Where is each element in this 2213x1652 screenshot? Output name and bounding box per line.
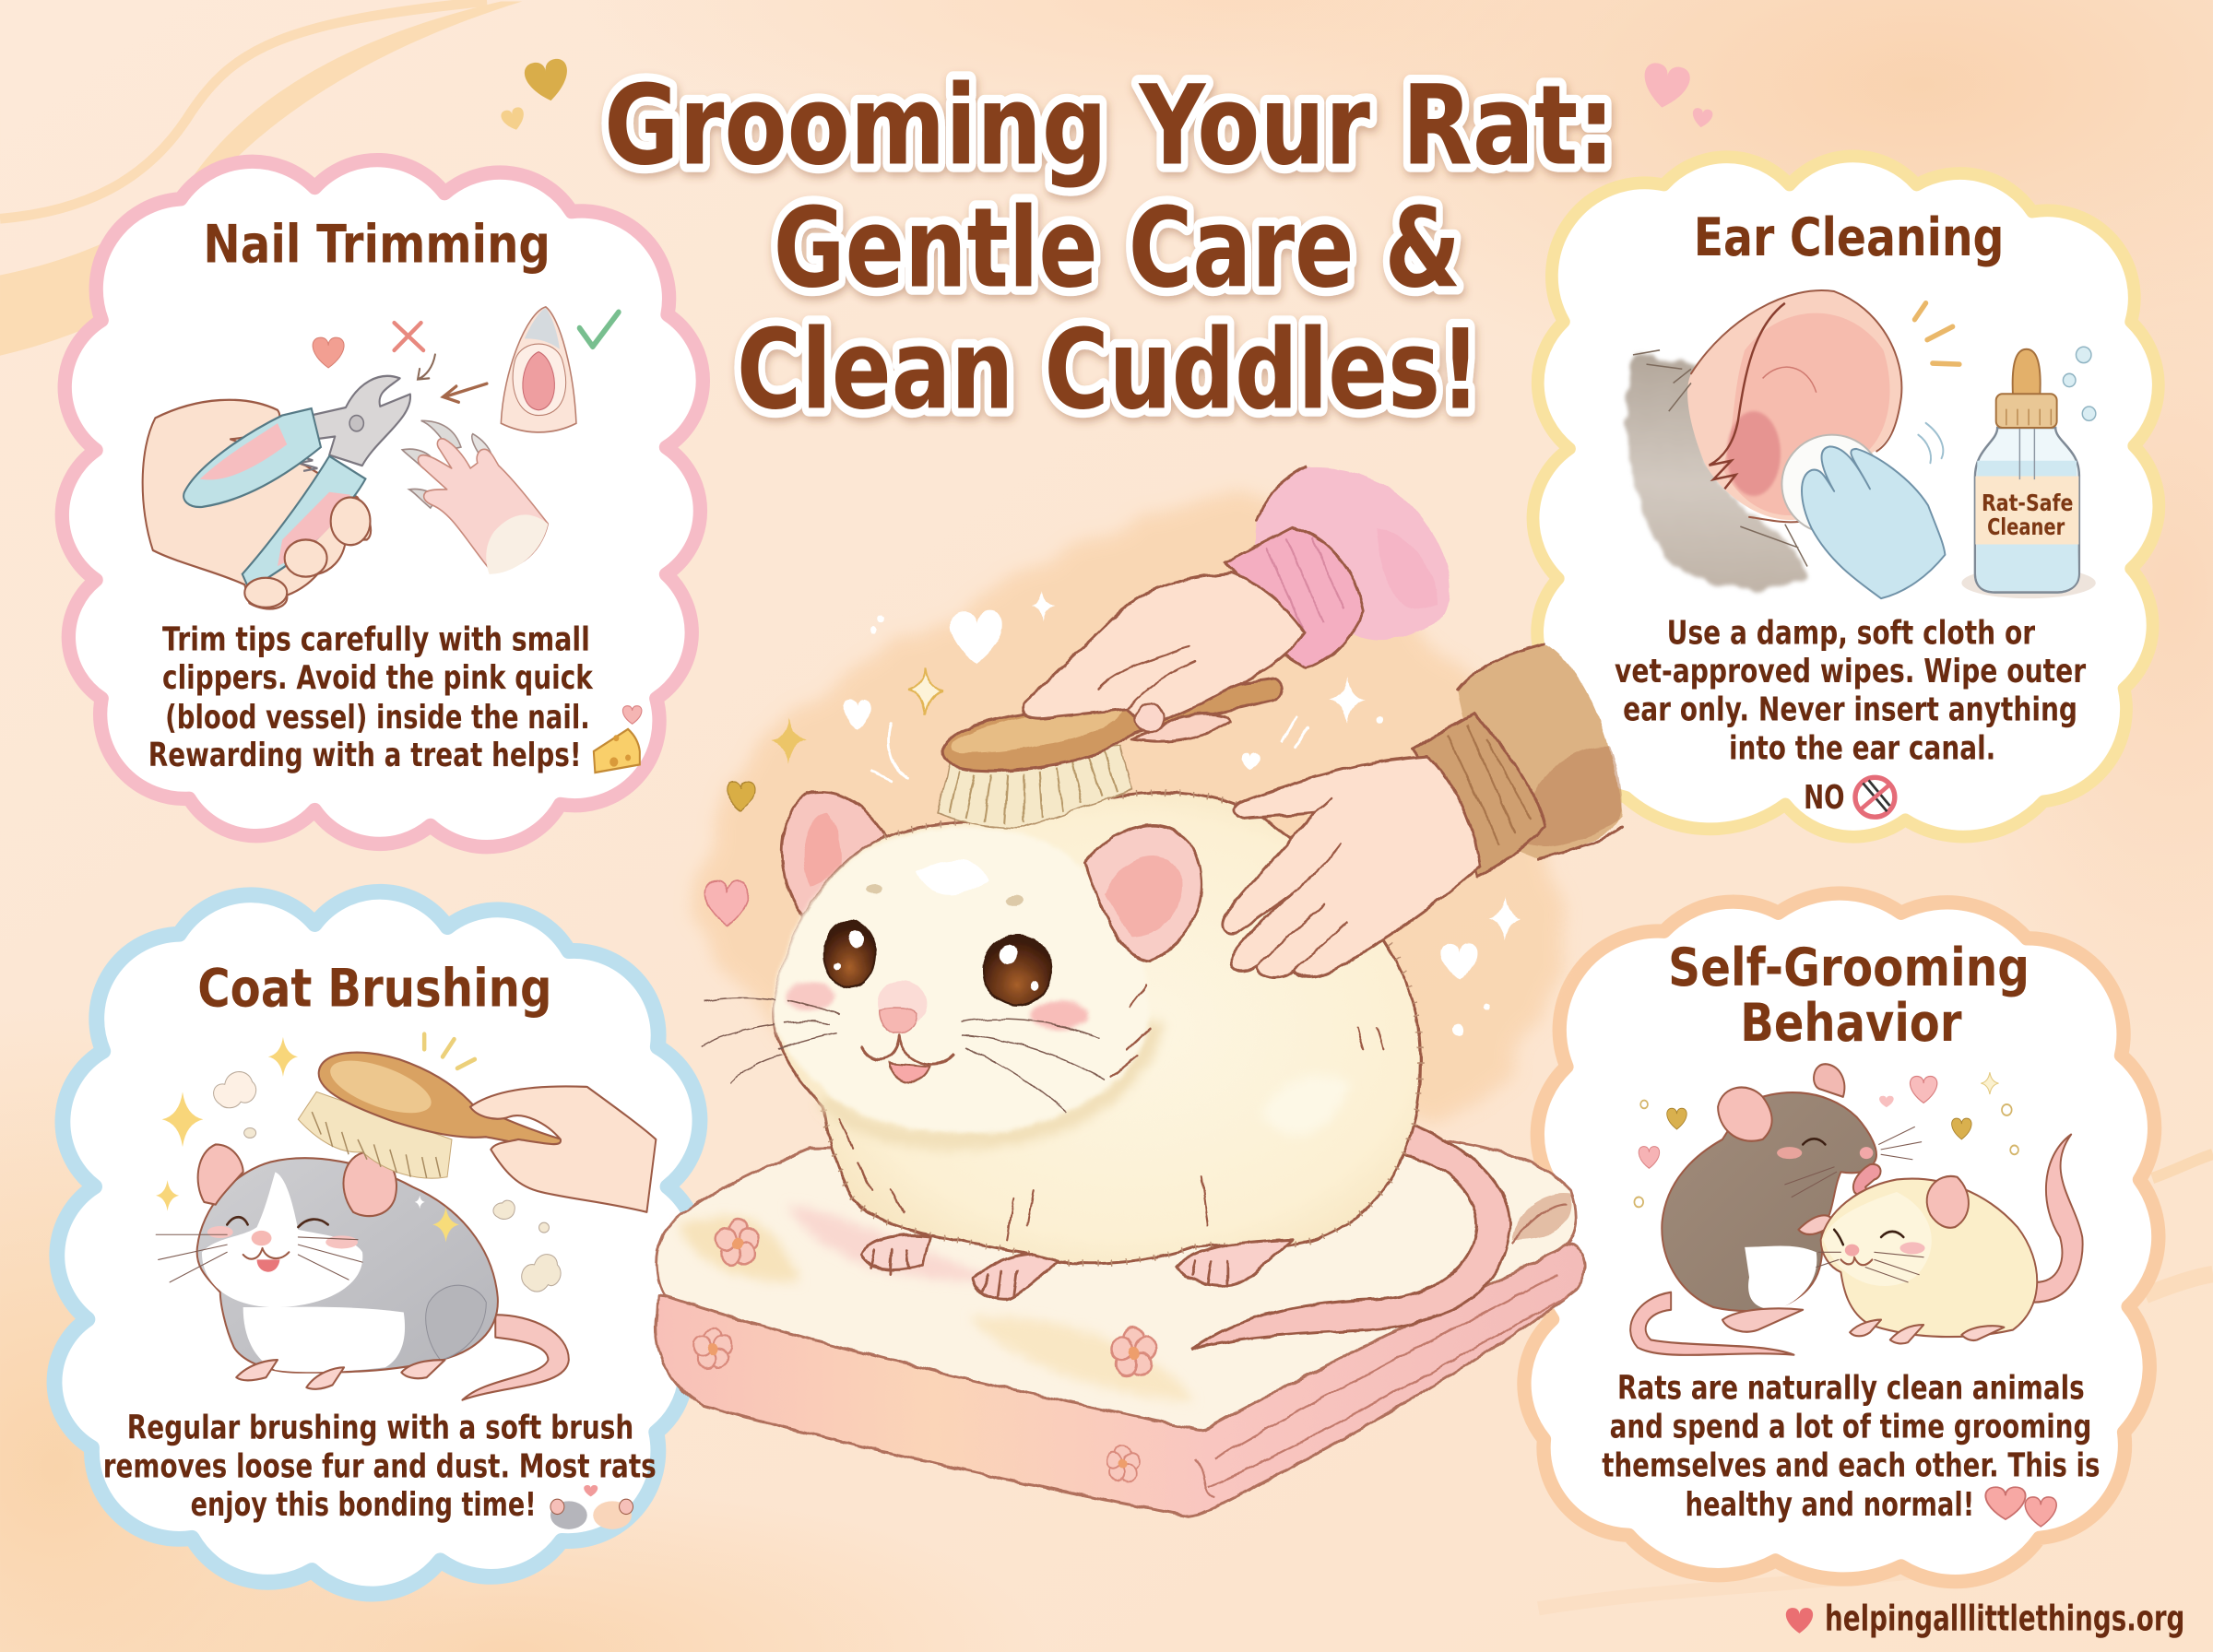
icon: cheese and heart	[594, 706, 642, 773]
icon: clippers	[183, 376, 410, 608]
panel frame: pink scallop	[62, 160, 703, 847]
towel: lower pink layer	[656, 1244, 1585, 1516]
rat: face	[702, 884, 1105, 1113]
icon: cut guide marks	[313, 323, 487, 402]
heading: Nail Trimming	[203, 215, 550, 276]
body text: Regular brushing with a soft brush	[127, 1409, 633, 1446]
bottle label text: Cleaner	[1987, 513, 2065, 540]
rat: tail	[1192, 1123, 1509, 1349]
icon: blue glove	[1802, 446, 1945, 598]
icon: dashes and wipe marks	[1914, 303, 1959, 463]
main illustration: rat on towel being brushed	[656, 466, 1623, 1516]
panel frame: blue scallop	[54, 891, 700, 1594]
body text: Use a damp, soft cloth or	[1667, 615, 2035, 653]
illustration: clippers, hand and paw	[143, 307, 619, 608]
icon: hand	[143, 400, 371, 608]
title: Grooming Your Rat:	[604, 63, 1615, 191]
icon: two pink hearts	[1985, 1487, 2056, 1527]
heading: Behavior	[1740, 993, 1962, 1054]
illustration: grey rat being brushed	[156, 1034, 656, 1529]
body text: (blood vessel) inside the nail.	[165, 699, 590, 737]
icon: footer heart	[1786, 1608, 1813, 1634]
panel: ear cleaning	[1533, 156, 2159, 837]
icon: green check	[580, 313, 619, 347]
icon: dust puffs and sparkles	[156, 1034, 561, 1292]
icon: bottle of cleaner	[1961, 347, 2096, 598]
panel frame: yellow scallop	[1533, 156, 2159, 837]
illustration: ear, glove and bottle	[1626, 290, 2096, 598]
illustration: two rats grooming	[1630, 1064, 2083, 1355]
body text: enjoy this bonding time!	[191, 1486, 537, 1524]
body text	[1615, 615, 2086, 817]
footer website credit	[1786, 1599, 2184, 1640]
panel: self-grooming behavior	[1524, 893, 2159, 1582]
decorative hearts near title	[500, 57, 1713, 133]
body text: into the ear canal.	[1729, 729, 1995, 767]
body text: ear only. Never insert anything	[1623, 690, 2077, 728]
icon: ear	[1633, 290, 1901, 566]
title	[604, 63, 1615, 434]
rat: near ear	[1085, 825, 1201, 961]
rat: paws	[860, 1235, 1293, 1300]
bottle label text	[1982, 490, 2073, 540]
body text: vet-approved wipes. Wipe outer	[1615, 653, 2086, 690]
body text	[148, 621, 594, 774]
sparkles and hearts around rat	[705, 591, 1521, 1036]
icon: two small rats kissing	[550, 1485, 633, 1529]
icon: cotton pad	[1781, 435, 1882, 534]
icon: brush	[298, 1050, 562, 1178]
body text	[1602, 1370, 2101, 1524]
heading: Self-Grooming	[1668, 938, 2030, 998]
panel: coat brushing	[54, 891, 700, 1594]
rat: body and head	[773, 793, 1421, 1264]
icon: fur	[1626, 354, 1807, 589]
bottle label text: Rat-Safe	[1982, 490, 2073, 516]
body text	[103, 1409, 657, 1524]
icon: nail cross-section	[501, 307, 576, 432]
body text: Rats are naturally clean animals	[1617, 1370, 2085, 1408]
brush on rat's head	[938, 678, 1282, 828]
body text: healthy and normal!	[1686, 1486, 1974, 1524]
towel: upper cream layer	[657, 1138, 1576, 1430]
icon: no-insert sign	[1855, 777, 1895, 817]
body text: clippers. Avoid the pink quick	[162, 659, 594, 697]
icon: tail	[462, 1315, 569, 1400]
top hand with pink sleeve	[1024, 466, 1450, 741]
icon: paw with claws	[402, 420, 548, 574]
heading: Coat Brushing	[197, 958, 551, 1019]
icon: brown rat	[1630, 1064, 1922, 1355]
body text: Rewarding with a treat helps!	[148, 737, 582, 774]
body text: removes loose fur and dust. Most rats	[103, 1448, 657, 1486]
icon: cream rat	[1817, 1135, 2083, 1343]
body text: Trim tips carefully with small	[162, 621, 590, 659]
title: Gentle Care &	[774, 185, 1461, 313]
title: Clean Cuddles!	[737, 306, 1481, 434]
heading: Ear Cleaning	[1694, 207, 2004, 268]
rat: far ear	[782, 792, 886, 915]
panel: nail trimming	[62, 160, 703, 847]
icon: grey rat	[156, 1144, 498, 1389]
body text: NO	[1804, 779, 1844, 817]
panel frame: orange scallop	[1524, 893, 2159, 1582]
icon: little hearts around rats	[1634, 1072, 2018, 1207]
heading	[1668, 938, 2030, 1054]
icon: hand holding brush	[470, 1086, 656, 1212]
central orange watercolor wash	[692, 499, 1561, 1143]
right hand with brown sleeve	[1223, 643, 1623, 977]
